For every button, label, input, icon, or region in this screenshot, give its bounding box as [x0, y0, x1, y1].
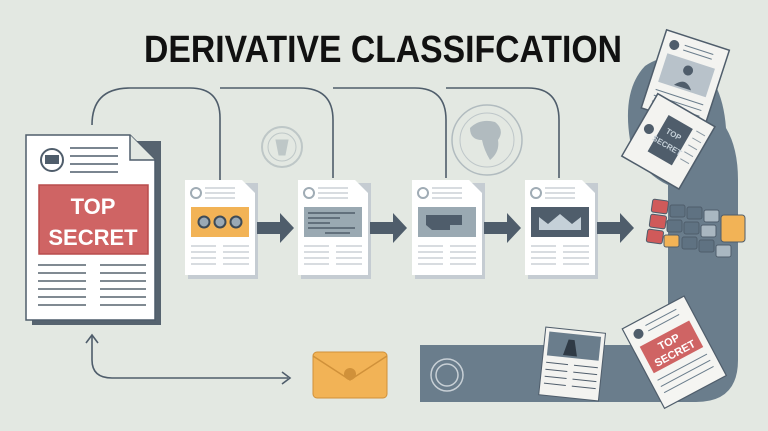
bottom seal — [431, 359, 463, 391]
connector lines — [92, 88, 559, 180]
bottom top secret doc — [622, 296, 726, 408]
arrows between docs — [257, 213, 634, 243]
envelope — [313, 352, 387, 398]
big doc: TOP SECRET: SECRET — [48, 225, 138, 250]
band: slate conveyor — [420, 57, 738, 402]
doc 3 — [412, 180, 485, 279]
keyboard blocks — [646, 199, 745, 257]
doc 2 — [298, 180, 371, 279]
faint seal — [262, 127, 302, 167]
big doc: TOP SECRET: TOP — [71, 194, 115, 219]
bottom left return arrow — [86, 335, 290, 384]
doc 4 — [525, 180, 598, 279]
top right tilted docs: SECRET — [651, 134, 683, 158]
title: DERIVATIVE CLASSIFCATION — [144, 29, 622, 71]
big doc: TOP SECRET — [26, 135, 161, 325]
doc 1 — [185, 180, 258, 279]
bottom top secret doc: TOP — [656, 332, 682, 353]
top right tilted docs: TOP — [664, 127, 683, 143]
bottom top secret doc: SECRET — [653, 338, 698, 370]
photo doc — [539, 327, 605, 401]
globe seal — [452, 105, 522, 175]
top right tilted docs — [622, 30, 729, 189]
